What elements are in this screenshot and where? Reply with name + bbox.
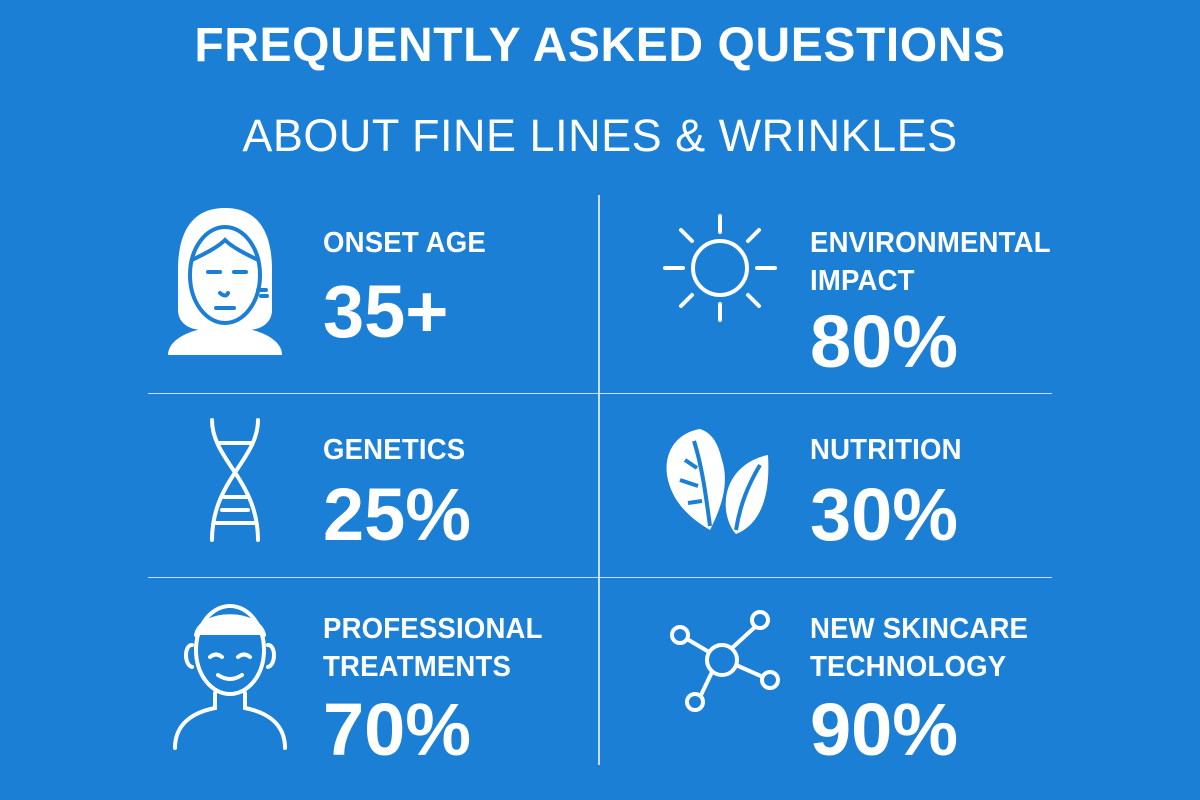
label: TREATMENTS: [323, 651, 511, 683]
label: NEW SKINCARE: [810, 613, 1028, 645]
label: PROFESSIONAL: [323, 613, 543, 645]
panel: professional treatments: [173, 604, 543, 771]
icon: sun: [663, 214, 777, 322]
number: 35+: [323, 270, 449, 353]
icon: molecule: [670, 610, 780, 712]
label: TECHNOLOGY: [810, 651, 1006, 683]
title: FREQUENTLY ASKED QUESTIONS: [194, 19, 1006, 72]
icon: face with headband: [173, 604, 287, 750]
panel: genetics: [210, 418, 471, 556]
label: [323, 613, 543, 683]
panel: onset age: [168, 208, 486, 355]
icon: leaves: [666, 429, 768, 534]
icon: woman face: [168, 208, 282, 355]
number: 90%: [810, 688, 958, 771]
icon: dna: [210, 418, 260, 542]
subtitle: ABOUT FINE LINES & WRINKLES: [242, 110, 958, 161]
label: [810, 613, 1028, 683]
label: NUTRITION: [810, 434, 962, 466]
label: ONSET AGE: [323, 227, 486, 259]
panel: environmental impact: [663, 214, 1051, 383]
number: 70%: [323, 688, 471, 771]
panel: nutrition: [666, 429, 962, 556]
number: 25%: [323, 473, 471, 556]
label: IMPACT: [810, 265, 915, 297]
panel: new skincare technology: [670, 610, 1028, 771]
number: 30%: [810, 473, 958, 556]
label: ENVIRONMENTAL: [810, 227, 1051, 259]
label: GENETICS: [323, 434, 465, 466]
label: [810, 227, 1051, 297]
number: 80%: [810, 300, 958, 383]
